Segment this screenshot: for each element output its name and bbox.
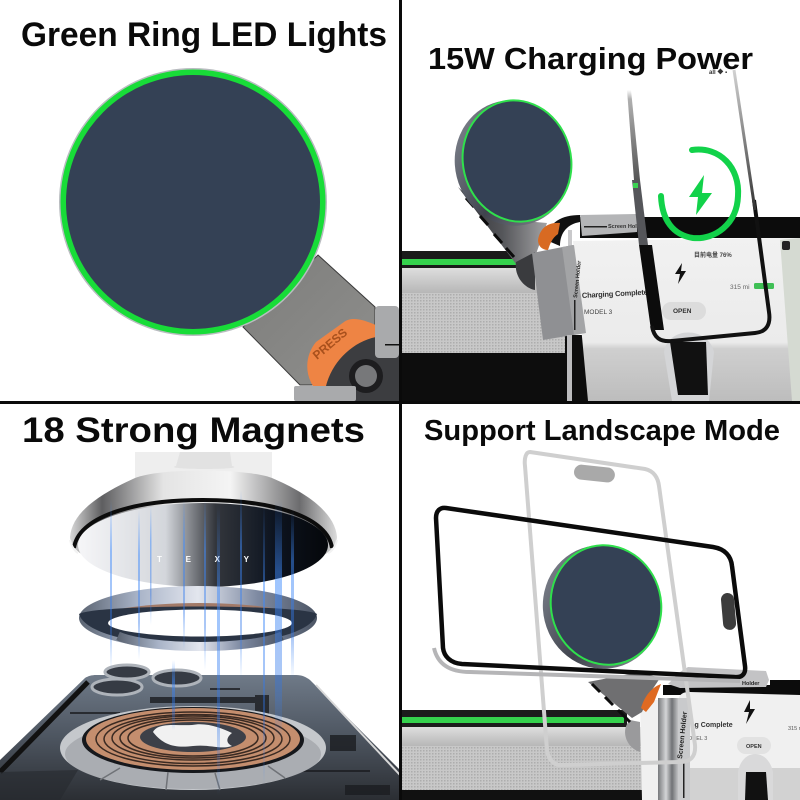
phone back [0, 675, 400, 800]
vehicle touchscreen: ODEL 3 [688, 736, 707, 742]
clamp front [532, 245, 586, 401]
magnetic disc [454, 99, 572, 226]
screen holder clamp: Screen Holder [608, 224, 646, 230]
mount arm [243, 255, 375, 385]
magnetic disc [542, 544, 662, 669]
heading: Support Landscape Mode [424, 415, 780, 447]
transparent portrait phone [525, 452, 695, 765]
vehicle touchscreen [640, 692, 800, 800]
mount arm and orange hinge [588, 672, 661, 752]
vehicle touchscreen: MODEL 3 [584, 309, 613, 316]
panel: 15W charging power [402, 41, 800, 401]
vehicle touchscreen: OPEN [673, 308, 692, 315]
magnetic field beams [110, 490, 294, 795]
vehicle touchscreen: Charging Complete [582, 288, 648, 300]
phone outline [627, 70, 769, 341]
vehicle touchscreen: OPEN [746, 744, 762, 750]
panel: support landscape mode [402, 415, 800, 800]
vehicle touchscreen: 315 mi [730, 284, 750, 291]
mount stem [135, 452, 272, 478]
screen holder clamp [658, 667, 769, 800]
phone status bar: all ◆ ▪ [709, 69, 727, 76]
hinge assembly [294, 306, 399, 401]
orange press button [307, 319, 376, 386]
camera lenses [92, 665, 201, 695]
car dashboard background [402, 217, 800, 401]
heading: 18 Strong Magnets [22, 411, 365, 450]
clamp front: Screen Holder [573, 260, 583, 298]
vehicle touchscreen [573, 238, 800, 401]
screen holder clamp [551, 214, 637, 246]
mount arm and orange hinge [458, 187, 560, 290]
heading: 15W Charging Power [428, 41, 753, 76]
screen holder clamp: Holder [742, 681, 760, 687]
screen holder clamp: Screen Holder [677, 711, 689, 759]
vehicle touchscreen: ging Complete [684, 722, 733, 729]
upper charger dome [70, 470, 337, 587]
car dashboard background [402, 680, 800, 800]
magnetic disc with green LED ring [59, 68, 327, 336]
magsafe ring and copper coil [60, 706, 326, 790]
heading: Green Ring LED Lights [21, 16, 387, 54]
landscape phone [434, 508, 745, 681]
panel: green ring LED lights [21, 16, 399, 401]
TEXY logo: TEXY [157, 555, 250, 564]
vehicle touchscreen: 目前电量 76% [694, 251, 732, 259]
charging icon [661, 150, 738, 238]
panel: 18 strong magnets [0, 411, 400, 800]
orange press button: PRESS [310, 325, 350, 362]
magnet ring [79, 586, 317, 650]
